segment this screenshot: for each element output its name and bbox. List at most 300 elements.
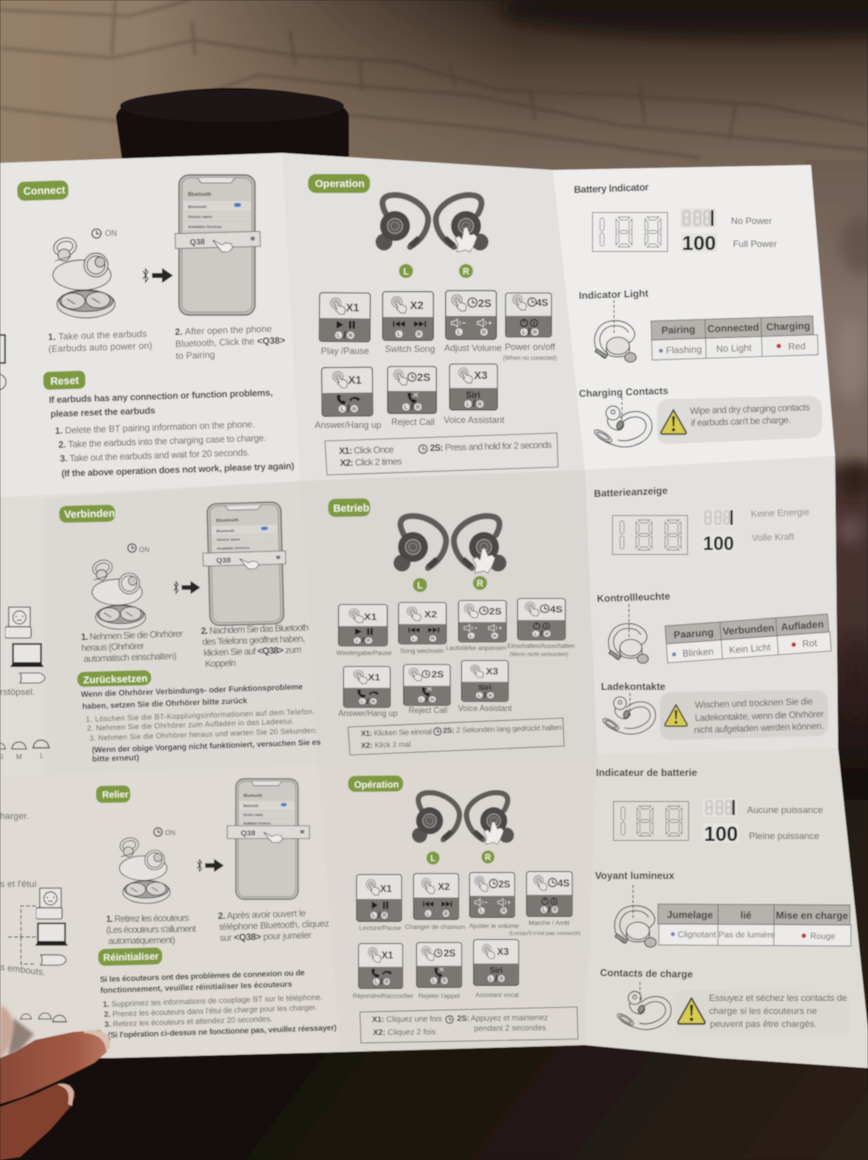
card: Assistant: L xyxy=(489,976,492,982)
card: Marche: R xyxy=(553,907,557,914)
card: voice assistant: Siri xyxy=(466,390,480,400)
illustration: case with earbuds: ON xyxy=(139,547,150,554)
text: step 1 xyxy=(81,629,184,664)
text: reset instructions: fonctionnement, veuillez réinitialiser les écouteurs xyxy=(100,980,293,995)
table: indicator: Flashing xyxy=(666,344,702,357)
text: Reset instructions: If earbuds has any connection or function problems, xyxy=(49,388,273,405)
card: play pause: / xyxy=(343,330,346,341)
text: step 1: automatisch einschalten) xyxy=(83,651,177,664)
label: Aucune puissance: Aucune puissance xyxy=(747,805,823,815)
text: Reset instructions: 3. Take out the earbuds and wait for 20 seconds. xyxy=(60,447,250,464)
text: step 2 xyxy=(175,323,286,361)
illustration: phone: Available Devices xyxy=(188,224,222,229)
illustration: phone: Device name xyxy=(217,538,240,542)
text: step 2: 2. Nachdem Sie das Bluetooth xyxy=(201,622,309,636)
card: Song wechseln xyxy=(399,603,446,644)
panel: Relier and Réinitialiser (French) xyxy=(96,779,337,1040)
label: Volle Kraft: Volle Kraft xyxy=(752,532,795,543)
card: Rejeter xyxy=(417,943,462,987)
card: Lecture: R xyxy=(383,913,387,919)
text: reset instructions: (Si l'opération ci-dessus ne fonctionne pas, veuillez réessayer) xyxy=(108,1023,337,1040)
card: voice assistant: R xyxy=(478,402,482,408)
card: power on off: 4S xyxy=(536,298,549,309)
callout: wipe contacts: nicht aufgeladen werden können. xyxy=(694,721,824,735)
badge: left earbud: L xyxy=(417,580,423,590)
illustration: case with earbuds xyxy=(118,828,176,903)
icon: no power display xyxy=(703,798,737,817)
card: Wiedergabe: R xyxy=(367,639,371,644)
table: indicator: Connected xyxy=(707,323,759,335)
card: voice assistant: Siri xyxy=(478,684,492,692)
text: German fragment: rstöpsel. xyxy=(0,687,35,697)
icon: full power display: 100 xyxy=(704,823,738,846)
label: Marche: Marche / Arrêt xyxy=(529,920,570,927)
illustration: earbud pair xyxy=(376,195,488,252)
card: answer hang up: R xyxy=(372,699,376,705)
card: Changer: X2 xyxy=(438,882,450,893)
heading: Operation: Operation xyxy=(315,178,365,190)
label: Einschalten: (Wenn nicht verbunden) xyxy=(510,652,568,658)
card: Einschalten: / xyxy=(540,629,543,638)
heading: Ladekontakte: Ladekontakte xyxy=(601,682,666,693)
label: Einschalten xyxy=(507,643,575,658)
card: answer hang up: X1 xyxy=(348,375,362,387)
card: voice assistant: / xyxy=(484,690,487,700)
heading: Betrieb: Betrieb xyxy=(333,502,369,515)
card: Wiedergabe xyxy=(339,605,387,646)
text: reset instructions: Wenn die Ohrhörer Verbindungs- oder Funktionsprobleme xyxy=(81,682,303,699)
card: Répondre: R xyxy=(385,979,389,986)
card: Répondre: X1 xyxy=(381,950,394,962)
card: answer hang up: L xyxy=(361,699,364,705)
badge: right earbud: R xyxy=(477,578,484,588)
label: No Power: No Power xyxy=(731,216,772,226)
text: step 1: (Earbuds auto power on) xyxy=(48,341,152,354)
text: reset instructions: Si les écouteurs ont des problèmes de connexion ou de xyxy=(100,968,306,984)
card: Lecture: / xyxy=(378,910,381,920)
label: Assistant: Assistant vocal xyxy=(475,992,519,999)
text: step 2 xyxy=(218,908,330,943)
label: Répondre: Répondre/Raccrocher xyxy=(353,993,413,1000)
badge: left earbud: L xyxy=(403,266,409,276)
badge: right earbud: R xyxy=(485,852,491,862)
heading: Opération: Opération xyxy=(354,779,399,791)
card: Assistant: Siri xyxy=(490,966,503,975)
panel: Battery, Indicator, Charging (English) xyxy=(574,182,822,447)
icons: ear tip sizes German xyxy=(0,740,50,761)
table: indicator: Pas de lumière xyxy=(718,929,775,940)
card: adjust volume: 2S xyxy=(478,298,491,310)
card: Assistant: / xyxy=(495,973,498,983)
table: indicator: Kein Licht xyxy=(729,642,771,656)
card: adjust volume xyxy=(446,291,496,339)
badge: left earbud xyxy=(399,264,413,278)
card: reject call: 2S xyxy=(432,670,444,680)
callout: wipe contacts: Ladekontakte, wenn die Ohrhörer xyxy=(695,709,824,723)
card: Rejeter: / xyxy=(438,975,441,985)
card: Song wechseln: L xyxy=(412,636,416,642)
card: power on off xyxy=(506,293,551,338)
card: switch song: L xyxy=(397,332,401,338)
text: step 1: 1. Take out the earbuds xyxy=(48,329,147,342)
card: Assistant: X3 xyxy=(497,947,509,958)
label: Marche xyxy=(509,920,581,937)
card: Lautstärke xyxy=(459,601,506,642)
card: switch song xyxy=(383,292,433,340)
card: Lautstärke: L xyxy=(470,634,473,639)
badge: right earbud xyxy=(473,576,487,590)
illustration: phone: Q38 xyxy=(190,237,206,247)
card: reject call: 2S xyxy=(417,372,430,384)
legend box: X1: Klicken Sie einmal xyxy=(361,727,432,738)
card: answer hang up: / xyxy=(347,404,350,415)
icon: Bluetooth arrow xyxy=(197,859,224,872)
label: answer hang up: Answer/Hang up xyxy=(315,420,381,430)
card: Song wechseln: X2 xyxy=(424,610,438,620)
panel: Betrieb (German) xyxy=(328,498,575,755)
text: step 2: 2. After open the phone xyxy=(175,324,272,337)
card: reject call: R xyxy=(431,697,435,703)
card: Einschalten xyxy=(518,599,565,640)
illustration: earbud pair xyxy=(412,793,514,844)
callout: wipe contacts: Wischen und trocknen Sie die xyxy=(695,696,813,710)
text: reset instructions: 2. Prenez les écouteurs dans l'étui de charge pour les charger. xyxy=(104,1003,317,1019)
panel: Verbinden and Zurücksetzen (German) xyxy=(59,502,322,764)
legend box: X2: Cliquez 2 fois xyxy=(373,1027,436,1037)
label: Marche: (Lorsqu'il n'est pas connecté) xyxy=(509,931,581,937)
icon: full power display: 100 xyxy=(703,534,734,555)
card: adjust volume: L xyxy=(457,330,461,336)
illustration: phone xyxy=(175,175,261,315)
card: reject call: / xyxy=(426,694,429,704)
badge: left earbud xyxy=(413,578,427,592)
photo: hand holding the paper xyxy=(0,1005,110,1160)
table: indicator: Rot xyxy=(802,638,818,650)
label: voice assistant: Voice Assistant xyxy=(444,415,505,425)
label: switch song: Switch Song xyxy=(385,344,435,354)
card: switch song: X2 xyxy=(410,300,423,312)
text: step 2: Bluetooth, Click the <Q38> xyxy=(175,335,286,349)
card: play pause: R xyxy=(349,333,353,339)
callout: wipe contacts xyxy=(675,990,850,1036)
card: Ajuster xyxy=(470,873,515,917)
illustration: phone xyxy=(227,779,310,899)
card: voice assistant: X3 xyxy=(486,667,499,677)
table: indicator: Mise en charge xyxy=(776,911,849,922)
card: reject call: R xyxy=(416,405,420,411)
card: play pause: L xyxy=(337,333,341,339)
icon: car charger German xyxy=(20,673,45,683)
card: Marche: / xyxy=(548,904,551,914)
card: reject call: L xyxy=(404,405,408,411)
table: indicator xyxy=(658,904,851,946)
icon: laptop top xyxy=(0,335,5,363)
text: step 2: to Pairing xyxy=(176,350,215,361)
text: reset instructions: 2. Nehmen Sie die Ohrhörer zum Aufladen in das Ladeetui. xyxy=(87,717,294,733)
card: voice assistant: / xyxy=(473,399,476,410)
text: step 1: 1. Retirez les écouteurs xyxy=(106,913,189,924)
icons: ear tip sizes French xyxy=(20,1013,67,1022)
legend box: 2S: Press and hold for 2 seconds xyxy=(430,440,552,453)
illustration: phone: Available Devices xyxy=(217,546,249,551)
text: step 2: klicken Sie auf <Q38> zum xyxy=(203,645,302,658)
card: voice assistant xyxy=(450,364,497,410)
label: Keine Energie: Keine Energie xyxy=(751,507,809,519)
heading: Relier xyxy=(96,785,130,803)
heading: Contacts de charge: Contacts de charge xyxy=(600,968,693,981)
card: Song wechseln: R xyxy=(431,636,435,642)
table: indicator xyxy=(665,614,831,663)
table: indicator: lié xyxy=(740,910,752,921)
callout: wipe contacts: Wipe and dry charging contacts xyxy=(690,402,810,416)
text: reset instructions: (Wenn der obige Vorgang nicht funktioniert, versuchen Sie es xyxy=(92,738,321,755)
card: adjust volume: R xyxy=(482,330,486,336)
table: indicator: Red xyxy=(788,341,806,353)
icon: full power display: 100 xyxy=(682,233,716,255)
illustration: phone: Bluetooth xyxy=(188,192,211,198)
card: Einschalten: R xyxy=(545,632,549,637)
card: power on off: R xyxy=(533,330,537,336)
card: answer hang up xyxy=(344,667,390,707)
text: French fragment charger: harger. xyxy=(0,811,29,821)
card: reject call xyxy=(388,367,436,413)
legend box: X2: Click 2 times xyxy=(340,456,402,468)
label: answer hang up: Answer/Hang up xyxy=(338,709,398,718)
illustration: phone: Q38 xyxy=(241,829,255,837)
icons: ear tip sizes German: M xyxy=(16,754,22,761)
illustration: earbud contact xyxy=(593,397,652,447)
card: Ajuster: 2S xyxy=(498,880,511,891)
illustration: phone: Device name xyxy=(188,214,213,219)
illustration: case with earbuds xyxy=(91,544,150,629)
card: Wiedergabe: / xyxy=(362,636,365,645)
label: Einschalten: Einschalten/Ausschalten xyxy=(507,643,575,650)
connector lines: French xyxy=(8,906,36,964)
heading: Reset xyxy=(43,371,86,390)
label: Pleine puissance: Pleine puissance xyxy=(749,831,819,841)
legend box: X1: Click Once xyxy=(339,445,394,456)
legend box: X2: Klick 2 mal xyxy=(361,740,411,750)
legend box: X1: Cliquez une fois xyxy=(372,1014,442,1024)
illustration: phone: Device name xyxy=(243,813,263,817)
panel: Indicateur, Voyant, Contacts (French) xyxy=(595,768,851,1036)
badge: left earbud xyxy=(426,852,440,864)
text: reset instructions: 3. Retirez les écouteurs et attendez 20 secondes. xyxy=(104,1014,272,1029)
card: Ajuster: R xyxy=(502,908,506,915)
card: Rejeter: 2S xyxy=(444,949,456,960)
text: step 2: téléphone Bluetooth, cliquez xyxy=(219,919,330,932)
label: Wiedergabe: Wiedergabe/Pause xyxy=(336,650,392,657)
icon: LED display xyxy=(612,516,688,554)
table: indicator: Blinken xyxy=(682,647,714,660)
text: step 2: 2. Après avoir ouvert le xyxy=(218,908,306,921)
panel: Operation (English) xyxy=(308,174,558,475)
panel: left sliver with charging illustrations xyxy=(0,335,68,1022)
card: reject call: / xyxy=(411,402,414,413)
panel: Connect and Reset (English) xyxy=(17,175,294,479)
table: indicator: Jumelage xyxy=(667,910,713,921)
card: Marche: 4S xyxy=(558,879,570,890)
icon: laptop French xyxy=(35,923,68,946)
card: voice assistant: L xyxy=(466,402,470,408)
text: French fragment case: s et l'étui xyxy=(0,879,36,889)
heading: Verbinden xyxy=(59,505,115,523)
table: indicator: No Light xyxy=(716,343,752,355)
card: Lecture: L xyxy=(372,913,375,919)
panel: Batterieanzeige (German) xyxy=(594,486,831,740)
icon: Bluetooth arrow xyxy=(174,581,200,594)
card: answer hang up: L xyxy=(341,407,345,413)
legend box xyxy=(348,718,564,755)
icon: no power display xyxy=(702,508,735,527)
label: Full Power: Full Power xyxy=(733,239,777,249)
text: reset instructions: 1. Supprimez les informations de couplage BT sur le téléphone. xyxy=(103,993,323,1009)
illustration: earbud contact xyxy=(601,693,656,734)
heading: Batterieanzeige: Batterieanzeige xyxy=(594,486,668,500)
heading: Connect xyxy=(17,180,69,201)
card: voice assistant xyxy=(462,661,508,701)
card: play pause: X1 xyxy=(346,302,359,314)
heading: Zurücksetzen: Zurücksetzen xyxy=(83,674,148,686)
icon: Bluetooth arrow xyxy=(143,268,173,283)
label: adjust volume: Adjust Volume xyxy=(444,343,502,353)
card: Einschalten: L xyxy=(534,632,537,637)
card: voice assistant: R xyxy=(489,693,493,699)
illustration: case with earbuds xyxy=(52,229,117,318)
card: Marche: L xyxy=(542,907,546,914)
label: play pause: Play /Pause xyxy=(321,346,369,356)
text: step 1 xyxy=(106,913,197,946)
callout: wipe contacts: peuvent pas être chargés. xyxy=(710,1019,817,1029)
label: reject call: Reject Call xyxy=(409,706,448,715)
card: Assistant xyxy=(474,940,519,985)
heading: Indicator Light: Indicator Light xyxy=(579,289,649,302)
illustration: case with earbuds: ON xyxy=(165,830,176,837)
text: step 1 xyxy=(48,329,152,354)
illustration: phone: Bluetooth xyxy=(243,804,259,808)
text: step 1: 1. Nehmen Sie die Ohrhörer xyxy=(81,629,183,642)
card: answer hang up xyxy=(322,367,373,416)
illustration: earbud indicator xyxy=(615,885,656,947)
label: Lecture: Lecture/Pause xyxy=(359,925,401,932)
card: Ajuster: L xyxy=(480,908,483,915)
illustration: earbud indicator xyxy=(608,604,648,663)
illustration: earbud indicator xyxy=(595,300,636,362)
label: Lautstärke: Lautstärke anpassen xyxy=(446,645,507,652)
table: indicator: Charging xyxy=(766,321,810,333)
text: reset instructions: bitte erneut) xyxy=(92,753,140,764)
icon: LED display xyxy=(614,802,688,840)
heading: Réinitialiser xyxy=(98,947,162,966)
text: Reset instructions: please reset the earbuds xyxy=(50,405,155,419)
label: voice assistant: Voice Assistant xyxy=(458,704,513,713)
card: voice assistant: X3 xyxy=(474,370,487,382)
icon: laptop German xyxy=(10,644,44,667)
icon: car charger French xyxy=(41,955,66,965)
callout: wipe contacts xyxy=(660,690,828,740)
label: Rejeter: Rejeter l'appel xyxy=(418,993,460,1000)
card: Lautstärke: R xyxy=(493,634,497,639)
heading: Battery Indicator: Battery Indicator xyxy=(574,182,649,196)
heading: Opération xyxy=(348,775,403,792)
card: Rejeter: R xyxy=(443,978,447,985)
illustration: earbud pair xyxy=(394,516,506,573)
text: step 2 xyxy=(201,622,310,669)
label: power on off xyxy=(503,342,557,362)
text: step 2: sur <Q38> pour jumeler xyxy=(219,930,312,943)
callout: wipe contacts: Essuyez et séchez les contacts de xyxy=(709,993,847,1003)
legend box xyxy=(325,433,558,475)
icon: wall plug French xyxy=(36,888,62,919)
card: Assistant: R xyxy=(500,976,504,982)
illustration: phone xyxy=(202,502,287,626)
heading: Betrieb xyxy=(328,498,370,517)
card: Changer: L xyxy=(427,911,430,917)
text: reset instructions: 1. Löschen Sie die BT-Kopplungsinformationen auf dem Telefon. xyxy=(86,707,315,724)
badge: right earbud xyxy=(459,264,473,278)
card: Einschalten: 4S xyxy=(550,605,563,615)
card: Répondre xyxy=(359,944,403,988)
icon: round tip top xyxy=(0,374,6,390)
heading: Connect: Connect xyxy=(23,184,66,198)
heading: Indicateur de batterie: Indicateur de batterie xyxy=(596,768,698,779)
icon: wall plug German xyxy=(5,607,31,638)
card: power on off: / xyxy=(528,327,531,338)
legend box: 2S: Appuyez et maintenez xyxy=(457,1013,548,1023)
legend box xyxy=(360,1007,578,1043)
card: answer hang up: X1 xyxy=(368,673,381,683)
badge: right earbud: R xyxy=(463,266,470,276)
illustration: phone: Q38 xyxy=(216,556,231,565)
text: step 1: heraus (Ohrhörer xyxy=(81,641,144,653)
illustration: case with earbuds: ON xyxy=(105,229,117,238)
text: reset instructions xyxy=(100,967,337,1040)
card: answer hang up: R xyxy=(352,407,356,413)
legend box: pendant 2 secondes xyxy=(474,1023,546,1033)
legend box: 2S: 2 Sekunden lang gedrückt halten xyxy=(443,723,562,735)
card: Rejeter: L xyxy=(432,978,435,985)
heading: Voyant lumineux: Voyant lumineux xyxy=(595,871,675,882)
card: Lautstärke: 2S xyxy=(489,607,502,617)
heading: Verbinden: Verbinden xyxy=(64,508,115,521)
card: reject call xyxy=(404,665,450,705)
table: indicator: Clignotant xyxy=(678,929,717,939)
text: step 1: automatiquement) xyxy=(108,935,175,946)
label: Changer: Changer de chanson xyxy=(405,924,466,931)
label: power on off: Power on/off xyxy=(505,342,556,352)
text: Reset instructions xyxy=(49,387,294,479)
text: reset instructions: 3. Nehmen Sie die Ohrhörer heraus und warten Sie 20 Sekunden. xyxy=(89,726,317,743)
illustration: earbud contact xyxy=(616,982,671,1030)
heading: Charging Contacts: Charging Contacts xyxy=(579,386,669,400)
illustration: phone: Bluetooth xyxy=(216,529,235,533)
icon: no power display xyxy=(680,208,716,228)
heading: Kontrollleuchte: Kontrollleuchte xyxy=(597,591,671,605)
table: indicator: Paarung xyxy=(673,627,714,641)
callout: wipe contacts: charge si les écouteurs ne xyxy=(709,1006,817,1016)
text: Reset instructions: 2. Take the earbuds into the charging case to charge. xyxy=(58,433,266,450)
card: Changer xyxy=(414,874,459,919)
text: reset instructions: haben, setzen Sie die Ohrhörer bitte zurück xyxy=(82,696,248,711)
icon: LED display xyxy=(592,212,668,252)
heading: Réinitialiser: Réinitialiser xyxy=(103,951,159,964)
black cylinder object behind the paper xyxy=(116,88,349,160)
heading: Reset: Reset xyxy=(50,375,80,388)
callout: wipe contacts: if earbuds can't be charge. xyxy=(691,415,791,428)
text: step 2: Koppeln xyxy=(205,658,236,669)
card: Lecture xyxy=(357,875,402,921)
table: indicator: Pairing xyxy=(661,325,695,337)
